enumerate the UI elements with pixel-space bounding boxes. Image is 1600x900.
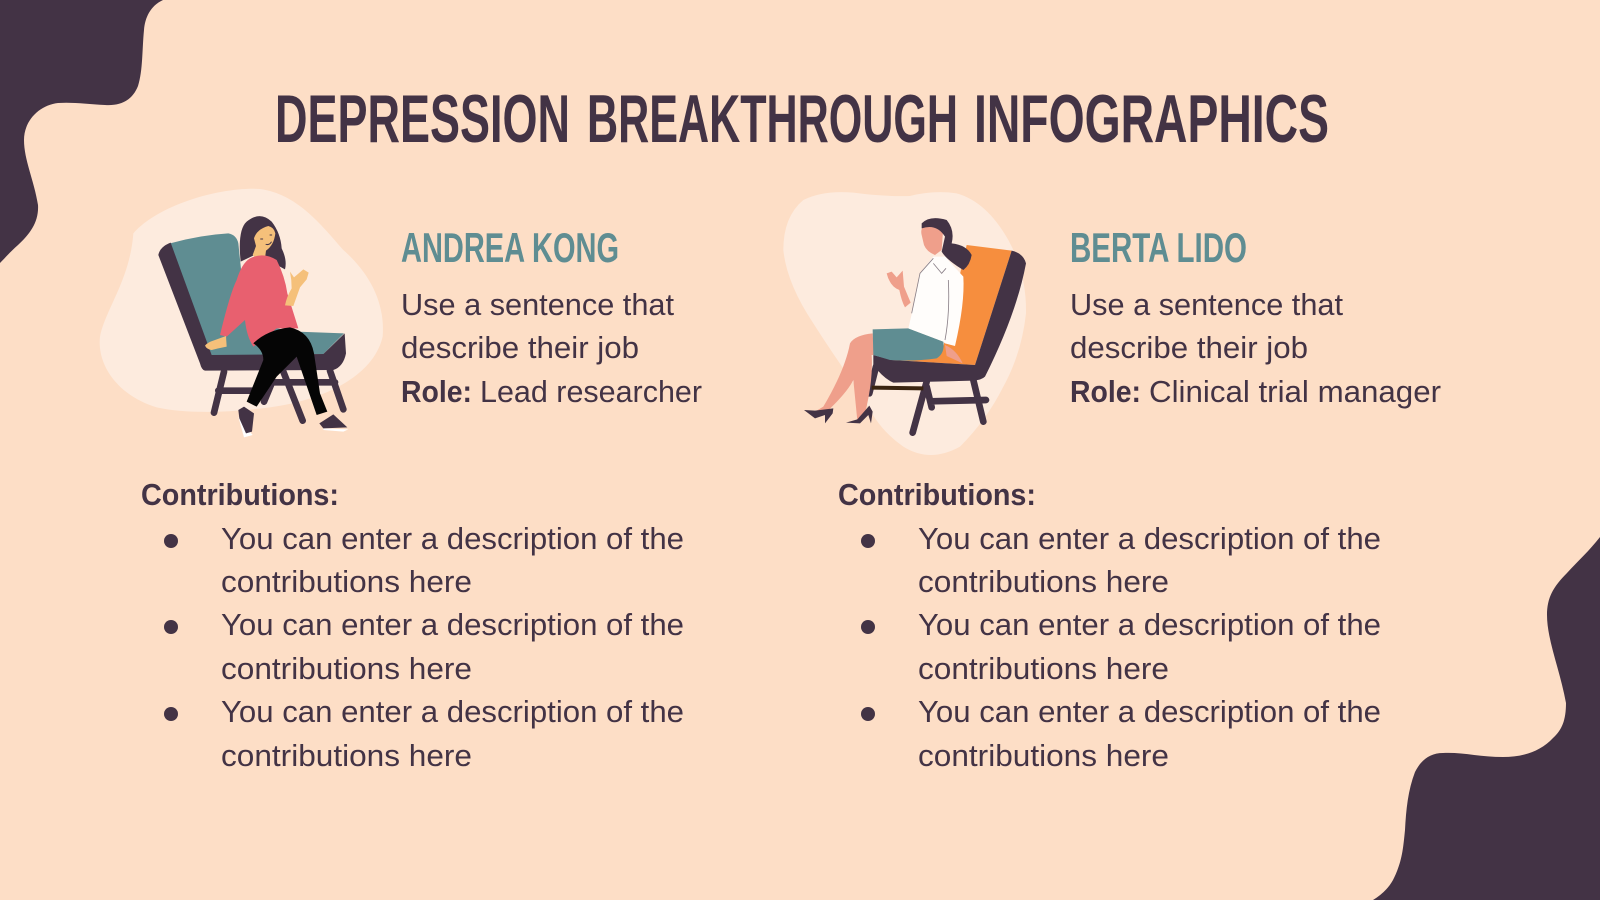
legs bbox=[815, 333, 874, 421]
chair legs bbox=[214, 370, 343, 421]
trousers bbox=[247, 327, 327, 415]
panel: Andrea Kong bbox=[100, 189, 702, 773]
contributions list: contributions here bbox=[918, 652, 1169, 686]
contributions list: contributions here bbox=[221, 739, 472, 773]
background blob bbox=[100, 189, 383, 412]
contributions list: Contributions: bbox=[141, 478, 339, 512]
job description: Role: bbox=[401, 375, 472, 409]
decorative blob: top left corner bbox=[0, 0, 163, 263]
contributions list: You can enter a description of the bbox=[221, 608, 684, 642]
job description bbox=[1070, 288, 1441, 409]
heels bbox=[804, 406, 873, 423]
contributions list: You can enter a description of the bbox=[918, 522, 1381, 556]
shirt bbox=[908, 257, 964, 346]
title bbox=[275, 81, 1329, 157]
chair legs bbox=[869, 367, 986, 433]
chair back and seat bbox=[170, 233, 344, 356]
chair strut bbox=[872, 382, 923, 394]
contributions list: contributions here bbox=[918, 739, 1169, 773]
chair back and seat bbox=[892, 245, 1012, 365]
contributions list bbox=[838, 478, 1381, 773]
hair bbox=[240, 216, 286, 269]
chair frame bbox=[158, 243, 346, 371]
job description: Use a sentence that bbox=[401, 288, 675, 322]
name: ANDREA KONG bbox=[401, 224, 619, 271]
contributions list: contributions here bbox=[221, 652, 472, 686]
job description: Lead researcher bbox=[480, 375, 702, 409]
neck and face bbox=[253, 226, 275, 259]
raised arm bbox=[887, 271, 911, 307]
title: INFOGRAPHICS bbox=[974, 81, 1329, 157]
decorative blob: bottom right corner bbox=[1373, 537, 1600, 900]
hands bbox=[205, 269, 309, 350]
head bbox=[921, 225, 943, 255]
job description: describe their job bbox=[401, 331, 639, 365]
contributions list: You can enter a description of the bbox=[918, 608, 1381, 642]
contributions list: You can enter a description of the bbox=[221, 522, 684, 556]
contributions list: contributions here bbox=[221, 565, 472, 599]
chair frame bbox=[873, 251, 1026, 383]
background blob bbox=[783, 192, 1026, 455]
job description: Role: bbox=[1070, 375, 1141, 409]
job description: Clinical trial manager bbox=[1149, 375, 1441, 409]
glasses, eyes and smile bbox=[261, 235, 272, 245]
name: BERTA LIDO bbox=[1070, 224, 1247, 271]
skirt bbox=[873, 328, 944, 361]
contributions list: contributions here bbox=[918, 565, 1169, 599]
contributions list: You can enter a description of the bbox=[918, 695, 1381, 729]
sweater bbox=[220, 255, 298, 347]
arm and hand on seat bbox=[945, 345, 963, 363]
shoes bbox=[238, 417, 348, 437]
shirt details bbox=[912, 258, 949, 340]
contributions list: You can enter a description of the bbox=[221, 695, 684, 729]
title: DEPRESSION bbox=[275, 81, 570, 157]
hair bbox=[922, 218, 972, 270]
contributions list bbox=[141, 478, 684, 773]
job description: Use a sentence that bbox=[1070, 288, 1344, 322]
job description bbox=[401, 288, 702, 409]
illustration: woman in white shirt on orange chair bbox=[783, 192, 1026, 455]
illustration: woman in pink sweater on teal chair bbox=[100, 189, 383, 437]
contributions list: Contributions: bbox=[838, 478, 1036, 512]
job description: describe their job bbox=[1070, 331, 1308, 365]
title: BREAKTHROUGH bbox=[587, 81, 958, 157]
panel: Berta Lido bbox=[783, 192, 1441, 773]
